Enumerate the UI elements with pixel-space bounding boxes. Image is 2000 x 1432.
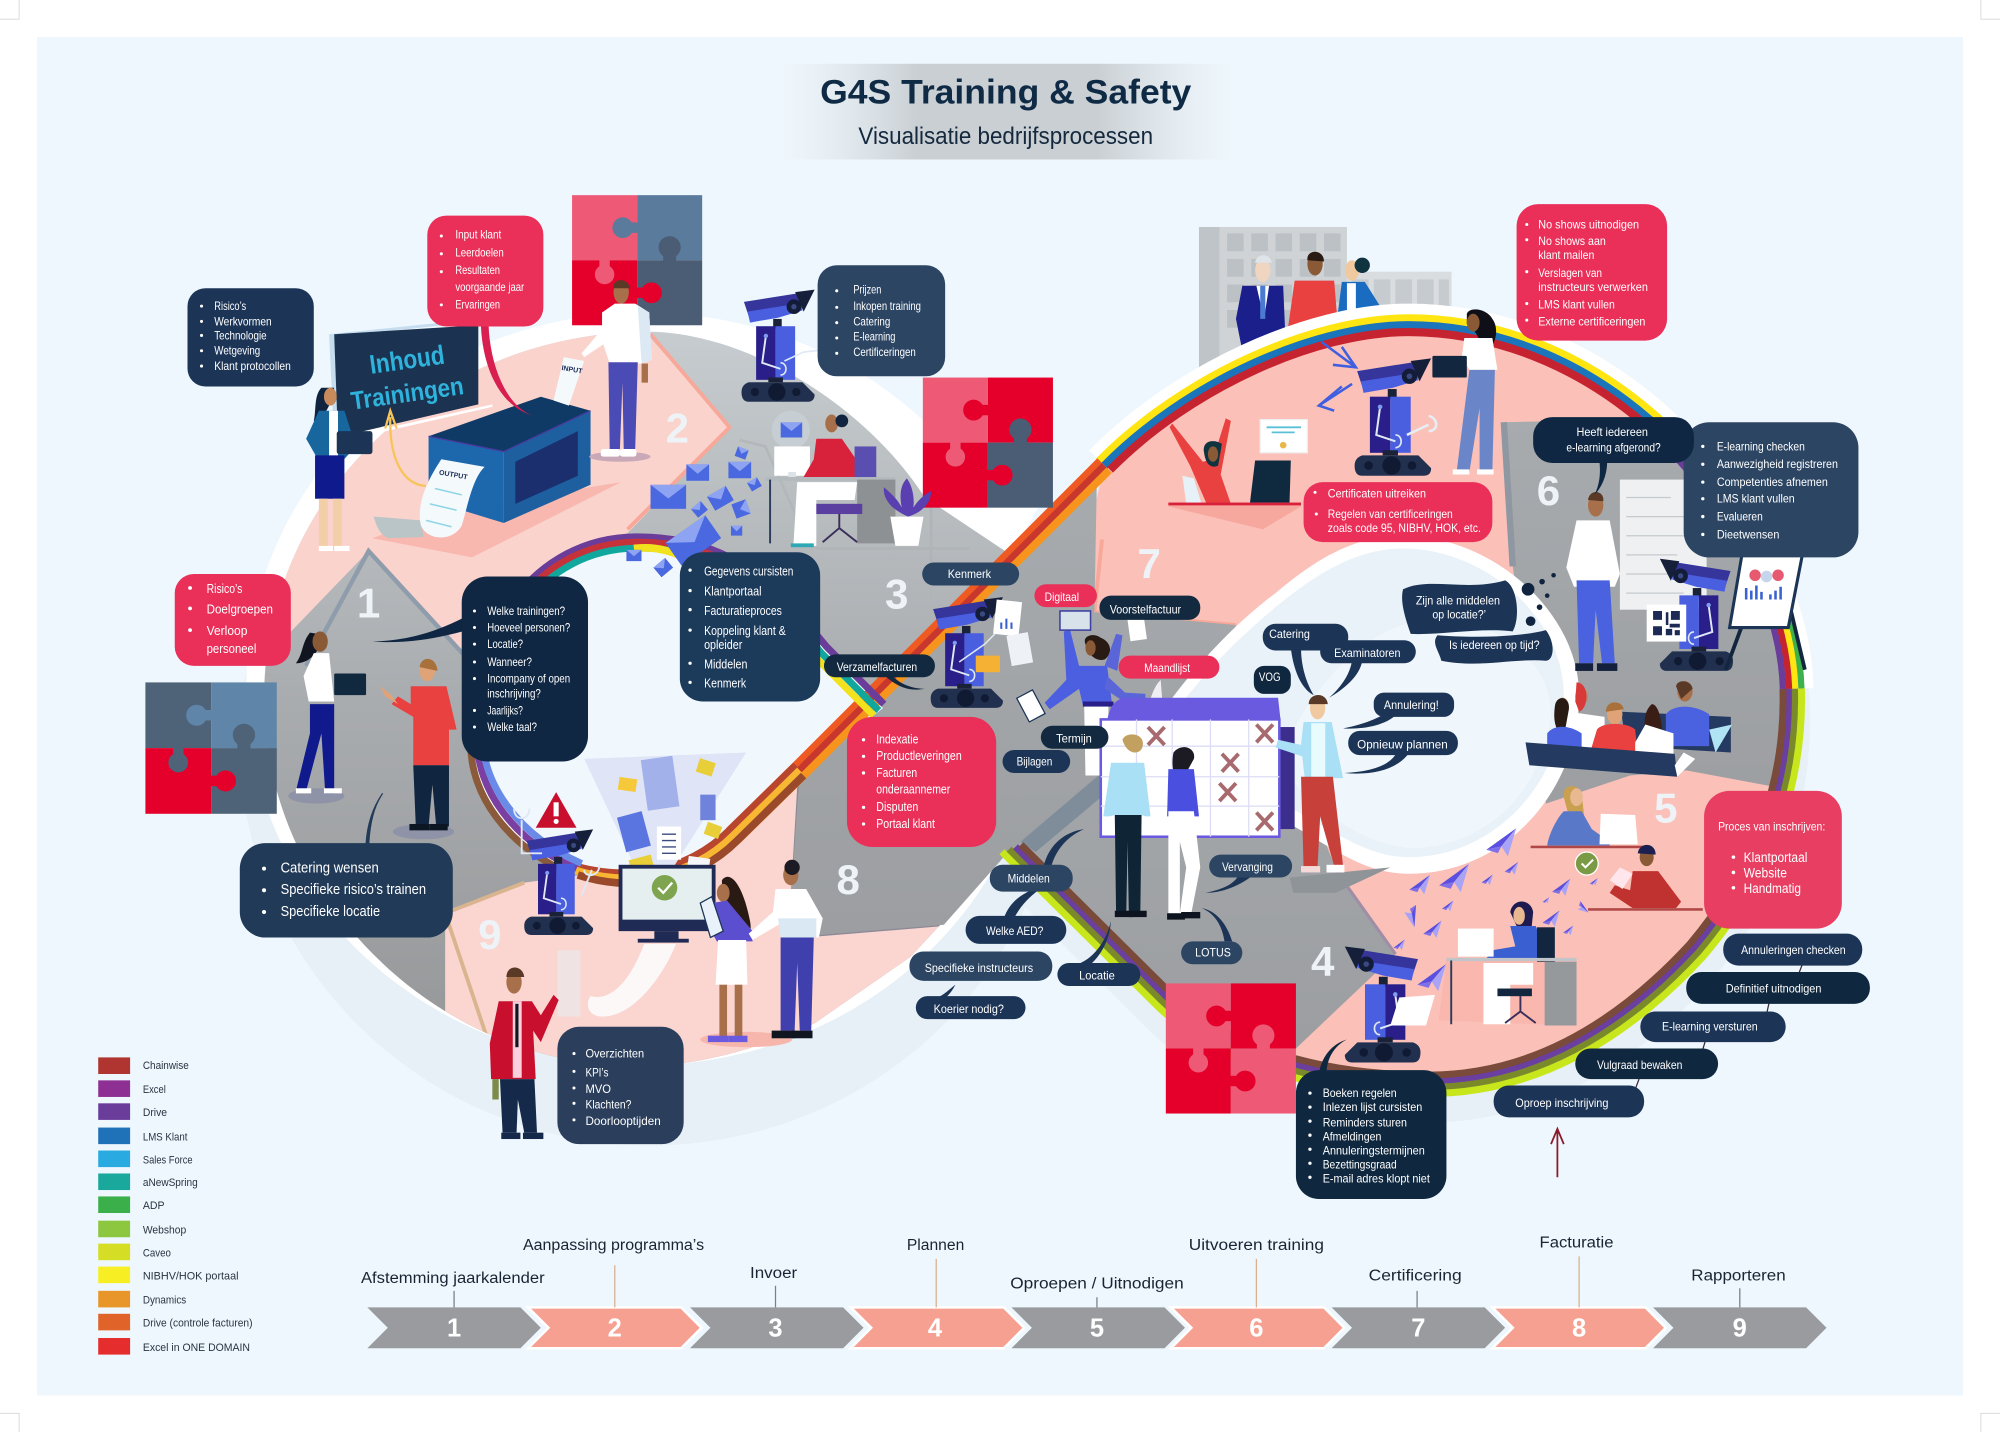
callout: Indexatie: Indexatie [876, 732, 918, 747]
monitor with green check [619, 865, 716, 943]
timeline: step numbers: 3 [768, 1315, 783, 1343]
thought bubbles: Zijn alle middelen [1402, 573, 1556, 664]
step numbers: 7 [1138, 540, 1161, 587]
callout: Overzichten: KPI’s [585, 1067, 609, 1080]
speech bubbles around planner: VOG [1259, 671, 1281, 684]
speech: Heeft iedereen [1533, 417, 1694, 495]
callout: Catering wensen: Specifieke risico’s trainen [281, 882, 426, 898]
person: man pointing at calendar [1276, 695, 1390, 893]
robot: center, section 3 to 8 [931, 597, 1003, 708]
certificate [1260, 420, 1307, 453]
pills around worker: Digitaal [1045, 591, 1079, 604]
white wedge below puzzle [972, 505, 1040, 546]
icon: green check badge [1575, 852, 1598, 875]
callout: Gegevens cursisten: Gegevens cursisten [704, 563, 793, 578]
rainbow system line: right lower side [1002, 688, 1801, 1093]
callout: Catering wensen: Catering wensen [281, 860, 379, 876]
tablet held up [1060, 611, 1091, 630]
paper: input: INPUT [561, 365, 583, 376]
legend: Caveo [143, 1247, 171, 1259]
timeline: step numbers: 1 [447, 1315, 461, 1343]
pills around worker [824, 563, 1219, 773]
callout: E-learning checken: LMS klant vullen [1717, 493, 1795, 506]
callout: No shows [1517, 204, 1667, 341]
callout: Welke trainingen: Hoeveel personen? [487, 621, 571, 634]
legend: Dynamics [143, 1295, 187, 1307]
callout: No shows: No shows aan [1538, 235, 1606, 248]
step numbers [357, 405, 1678, 985]
rainbow system line: central diagonal [729, 461, 1109, 840]
robot arm wrench, section 7 [1407, 416, 1436, 435]
callout: Input klant: Input klant [455, 229, 502, 242]
enrolment process pills: E-learning versturen [1662, 1021, 1758, 1034]
paper: output [374, 517, 423, 538]
timeline: pink leader lines [615, 1256, 1579, 1307]
subtitle: Visualisatie bedrijfsprocessen [858, 123, 1153, 150]
board: Inhoud Trainingen: Inhoud [368, 340, 446, 380]
person: woman with clipboard [700, 877, 792, 1047]
rainbow yellow highlight behind envelopes [634, 548, 699, 566]
callout: Boeken regelen [1296, 1040, 1446, 1199]
step numbers: 8 [837, 856, 860, 903]
timeline: labels: Facturatie [1540, 1234, 1614, 1251]
callout: Risico's list [188, 288, 314, 386]
callout: Certificaten: Regelen van certificeringen [1328, 508, 1453, 521]
callout: Welke trainingen: Incompany of open [487, 672, 570, 685]
callout: E-learning checken: E-learning checken [1717, 440, 1805, 453]
hole: left loop [474, 542, 880, 878]
puzzle: left [145, 682, 277, 814]
timeline: step numbers: 4 [928, 1315, 943, 1343]
paper: input [554, 357, 584, 406]
enrolment process pills: Definitief uitnodigen [1726, 982, 1821, 995]
callout: Catering wensen: Specifieke locatie [281, 904, 380, 920]
step numbers: 1 [357, 579, 380, 626]
center gray crossing [788, 474, 1236, 938]
section 1 and 2 pink area [285, 335, 727, 650]
callout: Risico's list: Technologie [214, 329, 267, 342]
legend: Sales Force [143, 1154, 193, 1166]
robot arm link to callout [784, 349, 827, 361]
puzzle: top [572, 195, 702, 325]
person: woman standing with tablet [1432, 309, 1497, 474]
callout: Prijzen: Prijzen [853, 283, 881, 296]
arrows: blue around robot [1319, 342, 1356, 411]
callout: Gegevens cursisten: Kenmerk [704, 676, 747, 691]
timeline: step numbers: 7 [1411, 1315, 1425, 1343]
callout: Overzichten: Klachten? [585, 1098, 632, 1111]
speech bubbles around planner: Opnieuw plannen [1357, 739, 1448, 752]
board: Inhoud Trainingen: Trainingen [349, 372, 465, 416]
pills: Middelen group: LOTUS [1195, 947, 1231, 960]
machine: input output box [372, 397, 621, 557]
timeline: step numbers [447, 1315, 1747, 1343]
thought bubbles: Zijn alle middelen: Zijn alle middelen [1416, 595, 1500, 608]
callout: Overzichten [557, 1027, 684, 1144]
callout: Indexatie: Disputen [876, 799, 918, 814]
callout: Indexatie: Facturen [876, 765, 917, 780]
callout: Overzichten: Doorlooptijden [585, 1115, 661, 1128]
speech bubbles around planner [1254, 624, 1458, 774]
legend: Excel [143, 1084, 166, 1096]
callout: Risico's list: Klant protocollen [214, 360, 291, 373]
step numbers: 2 [666, 405, 689, 452]
legend: aNewSpring [143, 1177, 198, 1189]
callout: Gegevens cursisten: Middelen [704, 656, 747, 671]
title: G4S Training & Safety [820, 73, 1191, 111]
legend: Drive [143, 1107, 167, 1119]
callout: Input klant: Ervaringen [455, 299, 500, 312]
robot: section 6 [1660, 559, 1733, 671]
robot: section 4 [1345, 946, 1420, 1063]
person: man in white shirt [749, 860, 823, 1038]
pills: Middelen group: Welke AED? [986, 925, 1044, 938]
person: woman seen from behind at calendar [1167, 747, 1200, 920]
seminar desk [1526, 742, 1677, 777]
timeline: leader lines [454, 1286, 1740, 1307]
pills around worker: Verzamelfacturen [837, 661, 917, 674]
pills: Middelen group [909, 829, 1292, 1019]
rainbow system line: right top arc [1099, 318, 1663, 470]
enrolment process pills: Annuleringen checken [1741, 944, 1846, 957]
callout: E-learning checken [1684, 422, 1858, 557]
icon: envelope bubble [781, 422, 802, 438]
calendar crosses [1148, 724, 1273, 830]
pills: Middelen group: Vervanging [1222, 861, 1273, 874]
legend: ADP [143, 1200, 165, 1212]
step numbers: 5 [1654, 785, 1678, 832]
person: receptionist woman, section 5 [1531, 786, 1645, 848]
timeline: labels: Oproepen / Uitnodigen [1010, 1275, 1184, 1292]
person: man with input paper, section 2 [582, 280, 652, 462]
robot: top, section 3 [741, 290, 815, 402]
speech: Is iedereen op tijd [1435, 630, 1553, 664]
person: man in red sweater, section 1 [380, 659, 457, 839]
robot: section 9 [524, 829, 593, 935]
person: man reading, section 5 [1588, 845, 1703, 911]
speech: Heeft iedereen: e-learning afgerond? [1566, 442, 1661, 455]
robot: center documents [959, 600, 1033, 672]
person: man with glasses, section 6 [1566, 492, 1620, 671]
machine: input output box: OUTPUT [438, 470, 469, 482]
callout: Boeken regelen: Bezettingsgraad [1323, 1158, 1397, 1171]
rainbow system line: right upper side [1652, 421, 1801, 689]
callout: Overzichten: MVO [585, 1083, 611, 1096]
section 9 pink area [445, 788, 940, 1063]
QR code [1647, 605, 1686, 642]
enrolment process pills: Vulgraad bewaken [1597, 1059, 1682, 1072]
robot arms, section 9 [514, 809, 599, 895]
callout: Gegevens cursisten: Facturatieproces [704, 603, 782, 618]
person: woman celebrating at desk [1168, 418, 1301, 529]
timeline: step numbers: 9 [1733, 1315, 1747, 1343]
callout: Proces van inschrijven: Proces van inschrijven: [1718, 820, 1825, 833]
callout: E-learning checken: Competenties afnemen [1717, 476, 1828, 489]
timeline: labels: Uitvoeren training [1189, 1237, 1324, 1254]
legend: Chainwise [143, 1060, 189, 1072]
timeline: labels: Invoer [750, 1265, 798, 1282]
callout: Welke trainingen: Welke trainingen? [487, 605, 565, 618]
pills around worker: Bijlagen [1017, 755, 1052, 768]
enrolment process pills [1494, 934, 1870, 1117]
thought bubbles: Zijn alle middelen: Is iedereen op tijd? [1449, 639, 1540, 652]
rainbow system line: lower left [570, 765, 804, 883]
person: woman at computer, section 4 [1439, 901, 1577, 1026]
callout: Welke trainingen: Jaarlijks? [487, 704, 523, 717]
enrolment process pills: Oproep inschrijving [1515, 1097, 1608, 1110]
robot: section 7 [1355, 358, 1431, 476]
paper strip report [557, 950, 580, 1017]
legend: Webshop [143, 1224, 186, 1236]
callout: Risico's red [175, 574, 291, 666]
pills: Middelen group: Middelen [1008, 873, 1050, 886]
callout: Risico's red: Doelgroepen [207, 602, 273, 617]
callout: Indexatie: Productleveringen [876, 748, 962, 763]
panel: right lobe sections 4, 5, 6, 7 [1012, 336, 1792, 1072]
legend: LMS Klant [143, 1131, 187, 1143]
callout: Proces van inschrijven: Website [1744, 866, 1787, 881]
callout: Certificaten: zoals code 95, NIBHV, HOK, etc. [1328, 522, 1481, 535]
callout: No shows: LMS klant vullen [1538, 299, 1615, 312]
callout: Boeken regelen: E-mail adres klopt niet [1323, 1172, 1431, 1185]
icons: flying envelopes [626, 446, 762, 577]
callout: Boeken regelen: Inlezen lijst cursisten [1323, 1101, 1422, 1114]
callout: Certificaten [1304, 482, 1492, 542]
callout: Boeken regelen: Boeken regelen [1323, 1087, 1397, 1100]
callout: No shows: Externe certificeringen [1538, 315, 1645, 328]
callout: No shows: No shows uitnodigen [1538, 218, 1639, 231]
pills around worker: Termijn [1056, 732, 1092, 745]
timeline: labels: Afstemming jaarkalender [361, 1270, 545, 1287]
callout: Welke trainingen [372, 577, 588, 761]
speech bubbles around planner: Catering [1269, 628, 1310, 641]
callout: Overzichten: Overzichten [585, 1047, 644, 1060]
icon: plant [884, 478, 931, 546]
legend [98, 1057, 253, 1355]
thought bubbles: Zijn alle middelen: op locatie?’ [1432, 609, 1486, 622]
callout: Indexatie [847, 717, 996, 847]
paper curl report [588, 944, 676, 1017]
callout: Prijzen: E-learning [853, 331, 895, 344]
callout: Boeken regelen: Afmeldingen [1323, 1130, 1381, 1143]
arrow: red start marker [1551, 1129, 1564, 1177]
people: seminar group at desk [1526, 681, 1732, 777]
calendar [1101, 698, 1295, 837]
speech: Heeft iedereen: Heeft iedereen [1577, 426, 1648, 439]
legend: Excel in ONE DOMAIN [143, 1342, 250, 1354]
callout: Welke trainingen: inschrijving? [487, 688, 541, 701]
callout: Input klant: Leerdoelen [455, 246, 504, 259]
callout: No shows: klant mailen [1538, 249, 1594, 262]
rainbow system line: left hole arc [469, 537, 884, 874]
arrow: output to board [390, 417, 426, 486]
callout: Welke trainingen: Welke taal? [487, 721, 537, 734]
callout: Gegevens cursisten: Koppeling klant & [704, 623, 786, 638]
speech bubbles around planner: Annulering! [1384, 699, 1439, 712]
puzzle: right of section 3 [923, 378, 1053, 508]
callout: Risico's list: Werkvormen [214, 315, 272, 328]
callout: Proces van inschrijven [1704, 791, 1842, 929]
callout: Gegevens cursisten [680, 552, 820, 702]
callout: Indexatie: Portaal klant [876, 816, 935, 831]
panel: left lobe sections 1, 2, 3, 9 [264, 332, 1005, 1063]
callout: Input klant: voorgaande jaar [455, 281, 524, 294]
legend: NIBHV/HOK portaal [143, 1270, 239, 1282]
timeline: step numbers: 6 [1249, 1315, 1263, 1343]
callout: Welke trainingen: Wanneer? [487, 656, 532, 669]
pills around worker: Voorstelfactuur [1110, 604, 1181, 617]
pills around worker: Kenmerk [948, 568, 991, 581]
callout: Gegevens cursisten: Klantportaal [704, 584, 761, 599]
board: Inhoud Trainingen [329, 319, 492, 440]
title band [781, 64, 1233, 159]
pills around worker: Maandlijst [1144, 662, 1191, 675]
timeline: step numbers: 5 [1090, 1315, 1104, 1343]
document fan [584, 753, 746, 895]
building behind management [1199, 227, 1452, 370]
callout: Prijzen [818, 265, 945, 376]
timeline: step numbers: 2 [608, 1315, 622, 1343]
person: woman with tablet, section 2 [306, 388, 372, 551]
callout: Prijzen: Inkopen training [853, 300, 921, 313]
alert triangle [536, 792, 577, 828]
callout: E-learning checken: Evalueren [1717, 510, 1763, 523]
callout: Input klant [427, 216, 543, 416]
timeline: labels: Certificering [1369, 1268, 1462, 1285]
section 4 gray [1011, 612, 1395, 1048]
callout: Input klant: Resultaten [455, 264, 500, 277]
step numbers: 9 [478, 911, 501, 958]
pills: Middelen group: Koerier nodig? [934, 1003, 1004, 1016]
person: multitasking worker [1017, 611, 1163, 776]
timeline: labels: Plannen [907, 1237, 964, 1254]
callout: Risico's list: Risico’s [214, 300, 246, 313]
timeline: labels: Aanpassing programma’s [523, 1237, 704, 1254]
callout: Prijzen: Certificeringen [853, 346, 916, 359]
person: woman with tablet, section 1 [288, 631, 366, 804]
callout: Prijzen: Catering [853, 315, 890, 328]
callout: Welke trainingen: Locatie? [487, 638, 523, 651]
callout: Indexatie: onderaannemer [876, 781, 951, 796]
crossing shadow band [1020, 740, 1154, 852]
timeline: chevrons [367, 1307, 1827, 1348]
infinity diagram: background halo [240, 313, 1792, 1145]
callout: Proces van inschrijven: Handmatig [1744, 881, 1801, 896]
whiteboard paper, section 6 [1620, 480, 1707, 610]
callout: No shows: Verslagen van [1538, 267, 1602, 280]
people: management trio [1236, 252, 1383, 357]
person: office woman at desk, section 3 [765, 411, 895, 547]
callout: Boeken regelen: Annuleringstermijnen [1323, 1144, 1425, 1157]
callout: Boeken regelen: Reminders sturen [1323, 1116, 1407, 1129]
callout: E-learning checken: Dieetwensen [1717, 528, 1779, 541]
pills: Middelen group: Locatie [1079, 970, 1115, 983]
puzzle: bottom [1166, 983, 1296, 1114]
legend: Drive (controle facturen) [143, 1318, 253, 1330]
callout: Risico's red: Verloop [207, 623, 247, 638]
timeline: labels [361, 1234, 1786, 1292]
section 6 gray [1504, 418, 1811, 816]
callout: E-learning checken: Aanwezigheid registreren [1717, 458, 1838, 471]
laptop held by robot [1390, 995, 1435, 1026]
hole: right loop [1135, 536, 1579, 874]
timeline: labels: Rapporteren [1691, 1268, 1786, 1285]
callout: Certificaten: Certificaten uitreiken [1328, 487, 1426, 500]
person: man seen from behind at calendar [1103, 734, 1151, 917]
timeline: step numbers: 8 [1572, 1315, 1586, 1343]
icons: paper planes [1393, 828, 1598, 991]
callout: Risico's list: Wetgeving [214, 345, 260, 358]
person: man in red jacket [490, 967, 559, 1139]
pills: Middelen group: Specifieke instructeurs [925, 962, 1033, 975]
step numbers: 6 [1537, 467, 1560, 514]
step numbers: 4 [1311, 938, 1335, 985]
callout: Risico's red: Risico’s [207, 581, 242, 596]
step numbers: 3 [885, 570, 908, 617]
speech bubbles around planner: Examinatoren [1334, 647, 1401, 660]
callout: Gegevens cursisten: opleider [704, 637, 743, 652]
callout: Proces van inschrijven: Klantportaal [1744, 850, 1807, 865]
callout: Catering wensen [240, 793, 453, 938]
callout: No shows: instructeurs verwerken [1538, 281, 1648, 294]
callout: Risico's red: personeel [207, 641, 256, 656]
easel with chart [1726, 548, 1805, 670]
